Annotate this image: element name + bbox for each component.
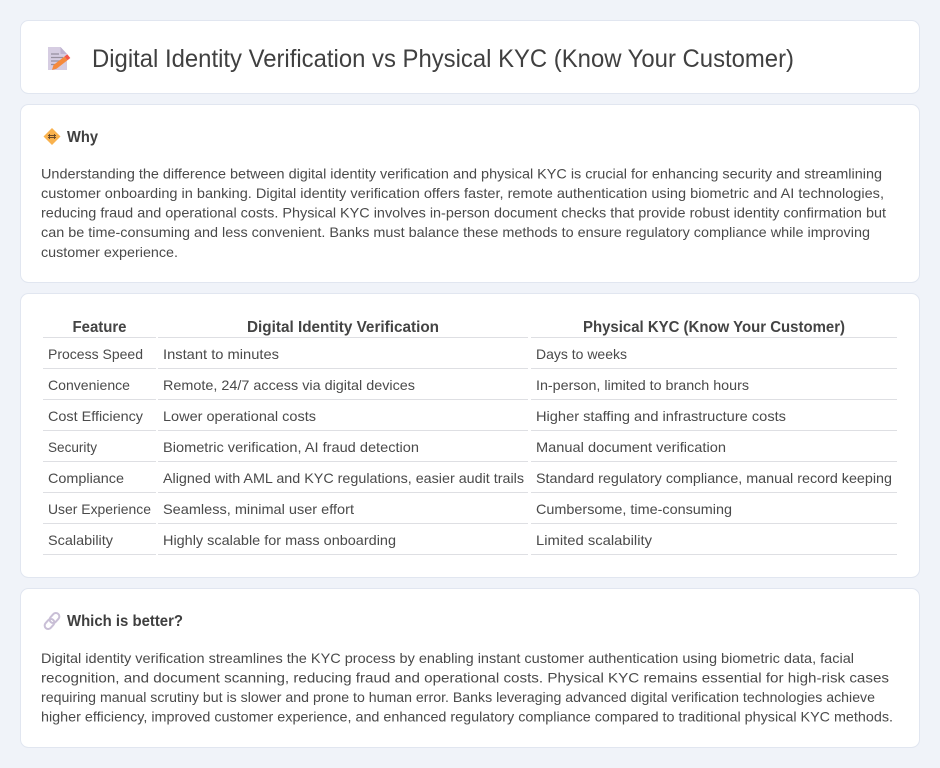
table row: security: Security: [48, 439, 97, 455]
text block: why paragraph: customer experience.: [41, 244, 178, 260]
text block: why paragraph: customer onboarding in banking. Digital identity verification offers faster, remote authentication using biometric and AI technologies,: [41, 185, 884, 201]
text block: why paragraph: can be time-consuming and less convenient. Banks must balance these methods to ensure regulatory compliance while improving: [41, 224, 870, 240]
table row: security: Manual document verification: [536, 439, 726, 455]
text block: why paragraph: [41, 166, 886, 260]
table header row: Physical KYC (Know Your Customer): [583, 319, 845, 336]
table row: scalability: Scalability: [48, 532, 113, 548]
table row: convenience: Convenience: [48, 377, 130, 393]
table header row: Digital Identity Verification: [247, 319, 439, 336]
heading: why: Why: [67, 129, 98, 146]
panel: comparison table: [20, 294, 920, 578]
panel: header: [20, 20, 920, 94]
table row: scalability: [48, 532, 652, 548]
table row: process speed: Instant to minutes: [163, 346, 279, 362]
icon: chain link: [43, 612, 61, 630]
table row: user experience: User Experience: [48, 501, 151, 517]
table row: cost efficiency: [48, 408, 786, 424]
heading: which is better: Which is better?: [67, 613, 183, 630]
table row: cost efficiency: Cost Efficiency: [48, 408, 143, 424]
table row: scalability: Highly scalable for mass onboarding: [163, 532, 396, 548]
table row: convenience: In-person, limited to branch hours: [536, 377, 749, 393]
panel: which is better: [20, 588, 920, 748]
table row: cost efficiency: Lower operational costs: [163, 408, 316, 424]
text block: which is better paragraph: Digital identity verification streamlines the KYC process by enabling instant customer authentication using biometric data, facial: [41, 650, 854, 666]
table row: compliance: Aligned with AML and KYC regulations, easier audit trails: [163, 470, 524, 486]
table header row: Feature: [72, 319, 127, 336]
text block: which is better paragraph: higher efficiency, improved customer experience, and enhanced regulatory compliance compared to traditional physical KYC methods.: [41, 708, 893, 724]
table row: compliance: Compliance: [48, 470, 124, 486]
text block: why paragraph: reducing fraud and operational costs. Physical KYC involves in-person document checks that provide robust identity confirmation but: [41, 204, 886, 220]
table row: process speed: [48, 346, 627, 362]
table row: compliance: Standard regulatory compliance, manual record keeping: [536, 470, 892, 486]
table row: user experience: Cumbersome, time-consuming: [536, 501, 732, 517]
text block: which is better paragraph: [41, 650, 893, 724]
title: Digital Identity Verification vs Physical KYC (Know Your Customer): [92, 45, 794, 73]
table row: user experience: [48, 501, 732, 517]
table row: process speed: Process Speed: [48, 346, 143, 362]
table row: scalability: Limited scalability: [536, 532, 652, 548]
table row: user experience: Seamless, minimal user effort: [163, 501, 354, 517]
table row: convenience: Remote, 24/7 access via digital devices: [163, 377, 415, 393]
panel: why: [20, 104, 920, 282]
table row: security: [48, 439, 726, 455]
table row: convenience: [48, 377, 749, 393]
icon: document with pencil: [48, 47, 70, 70]
text block: why paragraph: Understanding the difference between digital identity verification and physical KYC is crucial for enhancing security and streamlining: [41, 166, 882, 182]
table row: security: Biometric verification, AI fraud detection: [163, 439, 419, 455]
table header row: [72, 319, 845, 336]
text block: which is better paragraph: requiring manual scrutiny but is slower and prone to human error. Banks leveraging advanced digital verification technologies achieve: [41, 689, 875, 705]
text block: which is better paragraph: recognition, and document scanning, reducing fraud and operational costs. Physical KYC remains essential for high-risk cases: [41, 670, 889, 686]
table row: process speed: Days to weeks: [536, 346, 627, 362]
table row: cost efficiency: Higher staffing and infrastructure costs: [536, 408, 786, 424]
icon: diamond warning sign: [44, 128, 60, 145]
table row: compliance: [48, 470, 892, 486]
